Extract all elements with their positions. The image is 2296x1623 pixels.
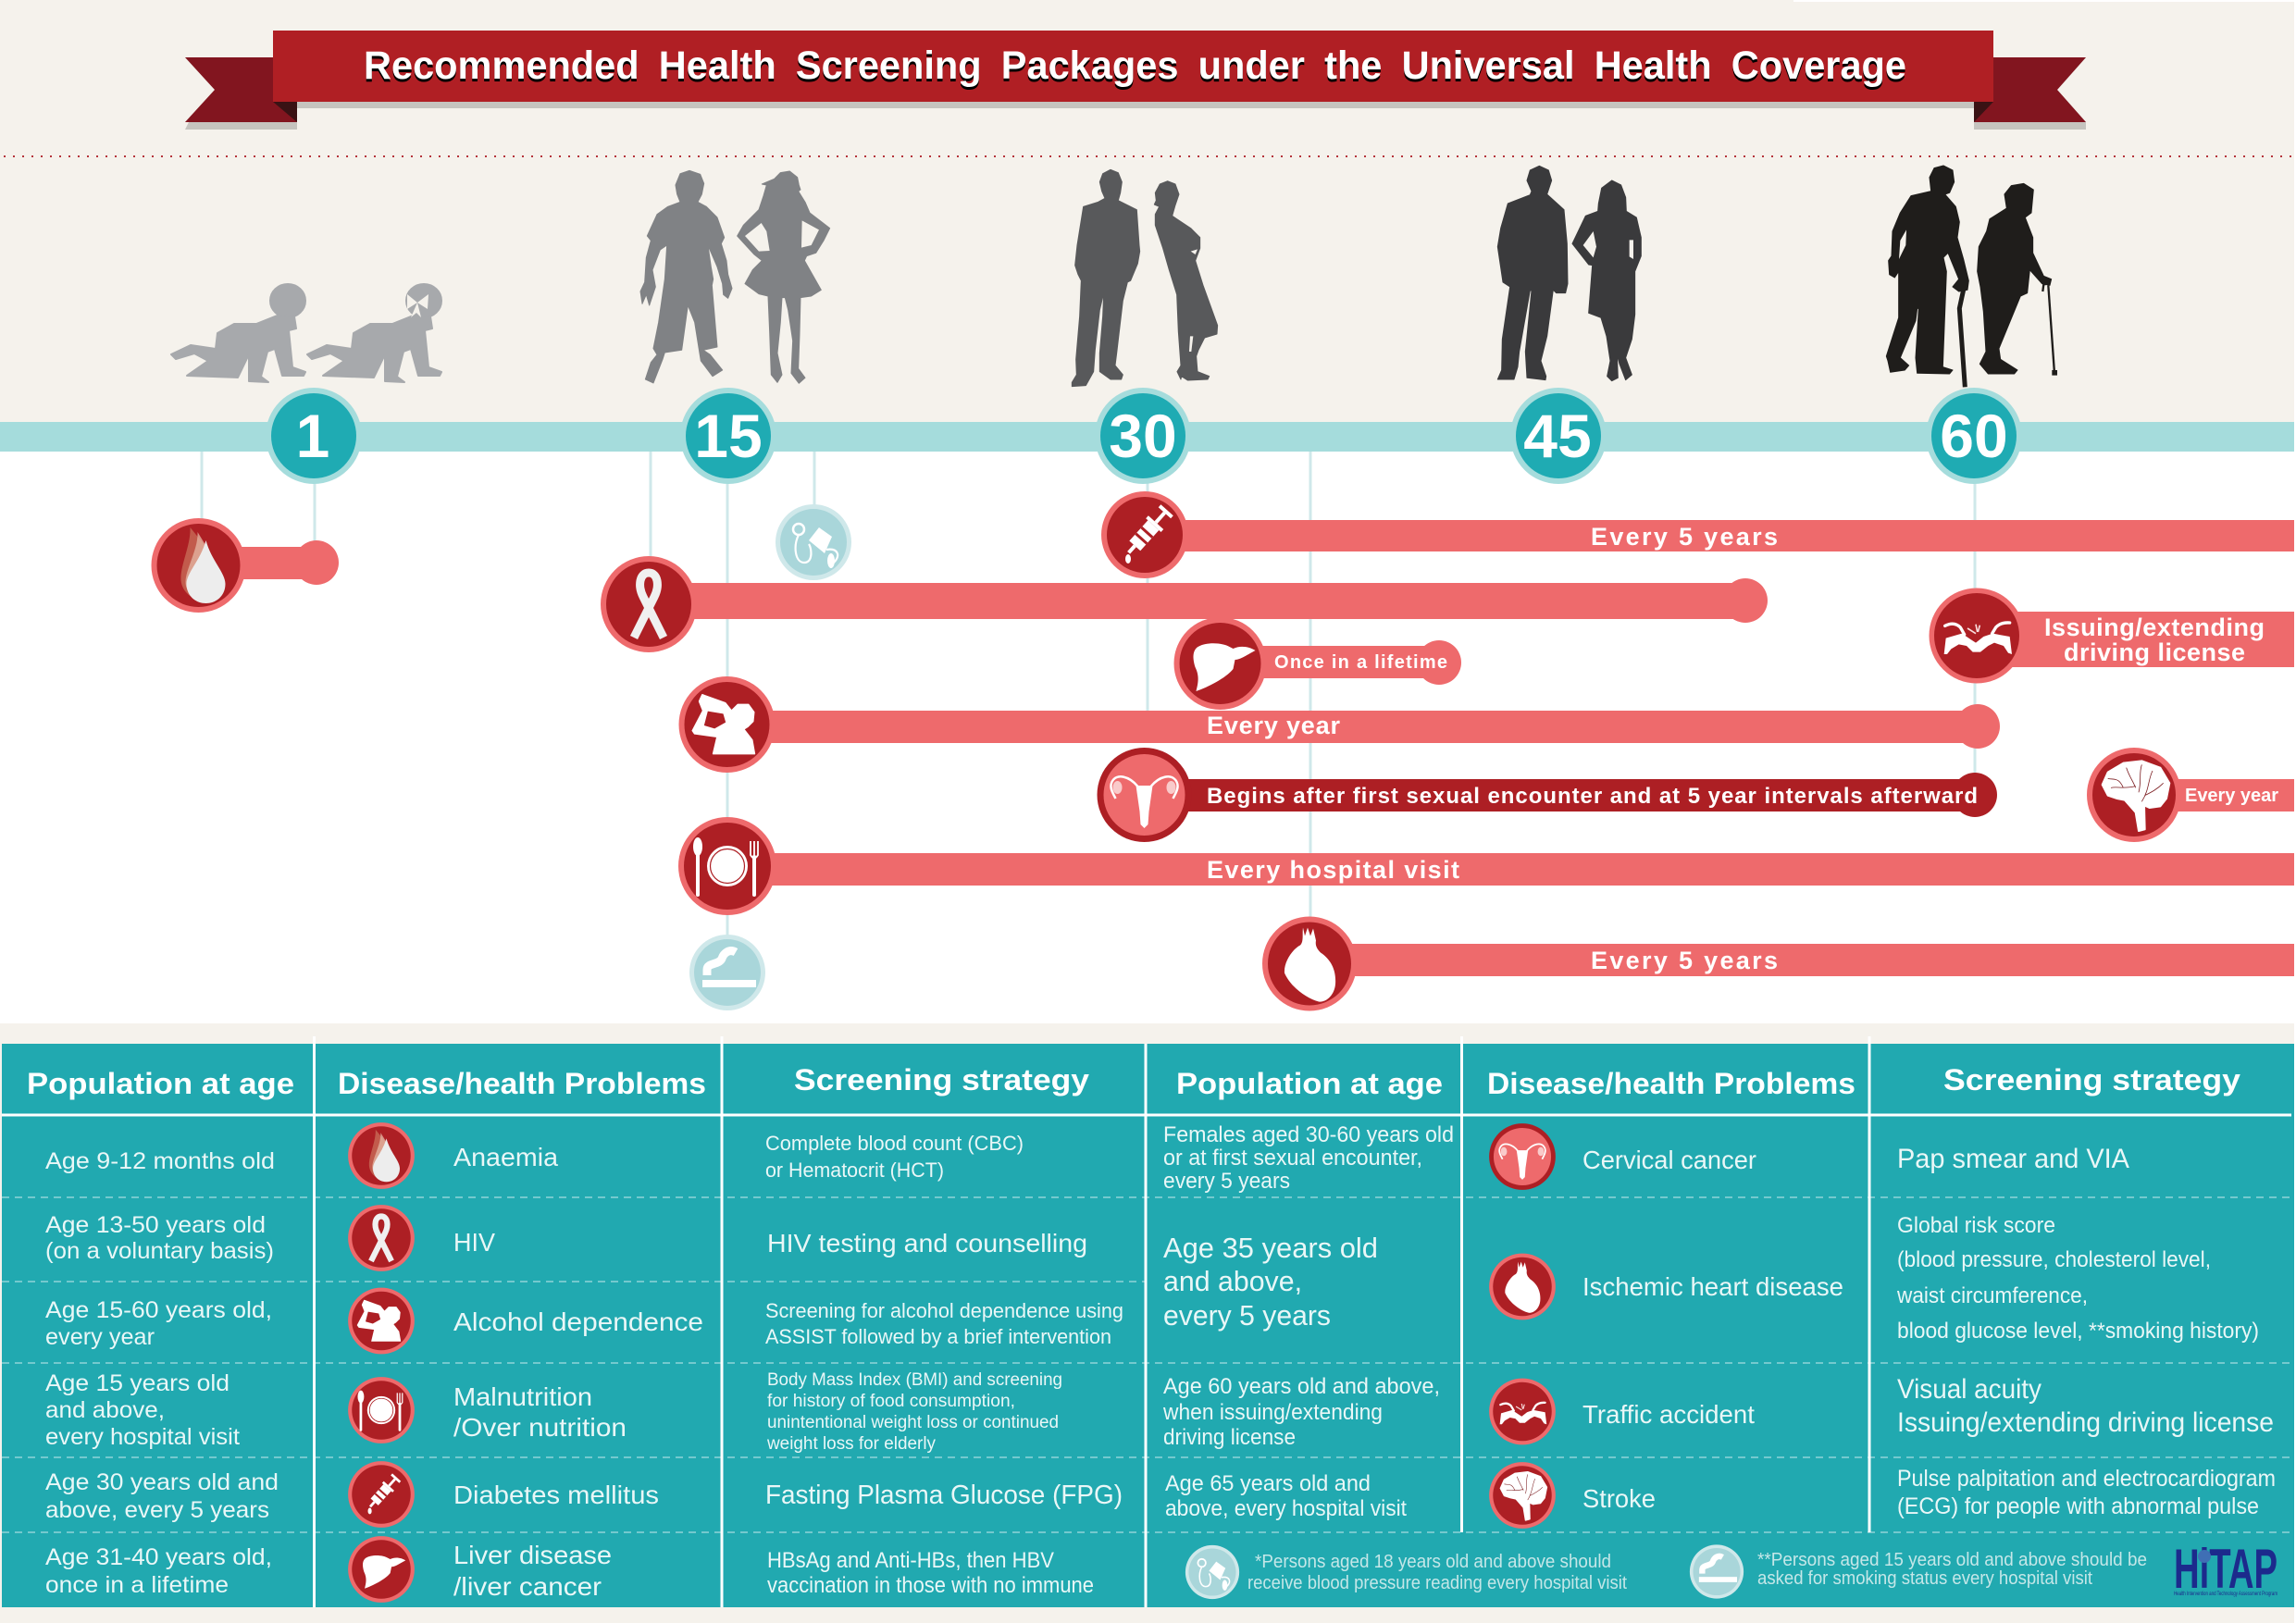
bar: stroke every year	[2134, 779, 2294, 812]
column: population right: driving license	[1163, 1425, 1296, 1450]
column: population right: Age 35 years old	[1163, 1232, 1378, 1264]
column: population right: Females aged 30-60 years old	[1163, 1122, 1454, 1147]
age marker 15	[680, 388, 776, 484]
silhouette: teenagers age 15	[640, 170, 830, 383]
bar: nutrition every hospital visit: Every hospital visit	[1207, 856, 1459, 884]
timeline connector lines	[202, 452, 1975, 944]
dotted separator	[4, 155, 2296, 157]
column: strategy right: Pulse palpitation and electrocardiogram	[1897, 1466, 2276, 1492]
bar: nutrition every hospital visit	[727, 853, 2294, 886]
column: strategy left: HBsAg and Anti-HBs, then HBV	[767, 1548, 1054, 1573]
column: population left: (on a voluntary basis)	[45, 1238, 274, 1264]
column: population left: Age 15-60 years old,	[45, 1297, 272, 1323]
footnote: blood pressure: receive blood pressure reading every hospital visit	[1247, 1573, 1627, 1593]
icon: liver	[1173, 617, 1266, 710]
column: strategy left: ASSIST followed by a brief intervention	[765, 1325, 1111, 1348]
column: disease names left: /liver cancer	[453, 1572, 602, 1601]
table headers	[27, 1063, 2240, 1100]
column: strategy left: Fasting Plasma Glucose (FPG)	[765, 1481, 1123, 1510]
icon: brain	[2087, 748, 2181, 842]
column: disease names left: HIV	[453, 1228, 495, 1257]
silhouette: babies age 1	[171, 284, 441, 382]
bar: alcohol every year: Every year	[1207, 712, 1340, 739]
column: population right: Age 60 years old and above,	[1163, 1374, 1440, 1399]
icon: plate and cutlery	[678, 817, 776, 915]
column: disease names left: Liver disease	[453, 1541, 612, 1569]
bar: cervical screening: Begins after first sexual encounter and at 5 year intervals afterward	[1207, 784, 1978, 809]
column: strategy right: blood glucose level, **smoking history)	[1897, 1319, 2259, 1344]
footnote: smoking: **Persons aged 15 years old and above should be	[1757, 1550, 2147, 1570]
column: population left: every year	[45, 1324, 155, 1350]
table headers: Disease/health Problems	[338, 1067, 706, 1100]
icon: anaemia drop	[152, 518, 246, 613]
bar: cervical screening	[1144, 773, 1997, 817]
column: population left: Age 30 years old and	[45, 1469, 279, 1495]
column: disease icons right	[1489, 1123, 1556, 1529]
column: strategy right: waist circumference,	[1896, 1283, 2088, 1308]
age marker 1	[266, 388, 362, 484]
column: population right: above, every hospital visit	[1165, 1496, 1407, 1521]
column: strategy left: unintentional weight loss or continued	[767, 1413, 1059, 1432]
silhouette: adults age 45	[1497, 166, 1641, 381]
column: population left: Age 9-12 months old	[45, 1148, 275, 1174]
table headers: Population at age	[1176, 1067, 1443, 1100]
title banner	[185, 31, 2086, 130]
column: strategy left: vaccination in those with no immune	[767, 1573, 1094, 1598]
column: population left: every hospital visit	[45, 1424, 240, 1450]
column: population right: Age 65 years old and	[1165, 1471, 1371, 1496]
column: population right: or at first sexual encounter,	[1163, 1146, 1422, 1171]
icon: car crash	[1929, 588, 2025, 683]
table headers: Screening strategy	[794, 1063, 1089, 1096]
column: strategy left: Screening for alcohol dependence using	[765, 1299, 1123, 1322]
table headers: Screening strategy	[1943, 1063, 2240, 1096]
column: population left: once in a lifetime	[45, 1572, 229, 1598]
bar: driving license	[1977, 612, 2294, 667]
table headers: Population at age	[27, 1067, 294, 1100]
age marker 45: 45	[1523, 402, 1592, 470]
column: strategy left: Body Mass Index (BMI) and screening	[767, 1370, 1062, 1390]
title text: Recommended Health Screening Packages under the Universal Health Coverage	[364, 43, 1906, 88]
footnote: smoking: asked for smoking status every hospital visit	[1757, 1568, 2092, 1589]
column: population right: and above,	[1163, 1265, 1302, 1297]
column: strategy left: HIV testing and counselling	[767, 1229, 1087, 1258]
column: disease names right	[1582, 1146, 1843, 1513]
column: strategy right: (blood pressure, cholesterol level,	[1897, 1247, 2211, 1272]
footnote: blood pressure	[1185, 1545, 1627, 1599]
column: population left: and above,	[45, 1397, 165, 1423]
icon: heart	[1262, 916, 1357, 1010]
table headers: Disease/health Problems	[1487, 1067, 1855, 1100]
bar: alcohol every year	[727, 704, 2000, 749]
column: disease names right: Cervical cancer	[1582, 1146, 1756, 1174]
screening table	[2, 1036, 2294, 1607]
column: population left	[45, 1148, 279, 1598]
age marker 15: 15	[694, 402, 763, 470]
column: strategy left: for history of food consumption,	[767, 1392, 1015, 1411]
bar: anaemia	[198, 540, 339, 585]
column: strategy right: Pap smear and VIA	[1897, 1144, 2129, 1174]
column: population right	[1162, 1122, 1454, 1521]
silhouette: seniors age 60	[1886, 166, 2057, 387]
age marker 30: 30	[1109, 402, 1177, 470]
age marker 45	[1510, 388, 1607, 484]
silhouette: adults age 30	[1072, 169, 1218, 387]
column: disease names left: Anaemia	[453, 1143, 558, 1171]
bar: heart disease every 5 years	[1309, 944, 2294, 976]
column: disease names right: Stroke	[1582, 1484, 1656, 1513]
column: strategy right: Issuing/extending driving license	[1897, 1407, 2274, 1438]
icon: HIV ribbon	[601, 556, 697, 652]
bar: stroke every year: Every year	[2185, 786, 2278, 806]
column: disease names left: Malnutrition	[453, 1382, 592, 1411]
column: population left: Age 13-50 years old	[45, 1212, 266, 1238]
column: strategy left: weight loss for elderly	[766, 1434, 936, 1454]
column: disease names left: Alcohol dependence	[453, 1307, 703, 1336]
footnote: blood pressure: *Persons aged 18 years old and above should	[1255, 1552, 1611, 1572]
icon: uterus	[1098, 748, 1192, 842]
column: disease names right: Ischemic heart disease	[1582, 1272, 1843, 1301]
column: disease names left	[453, 1143, 703, 1601]
column: disease names left: /Over nutrition	[453, 1413, 627, 1442]
column: population right: every 5 years	[1163, 1169, 1290, 1194]
column: population right: every 5 years	[1163, 1299, 1331, 1332]
column: disease names left: Diabetes mellitus	[453, 1481, 659, 1509]
column: strategy left	[765, 1132, 1123, 1598]
age marker 60: 60	[1940, 402, 2008, 470]
age marker 30	[1095, 388, 1191, 484]
column: strategy left: or Hematocrit (HCT)	[765, 1158, 944, 1182]
column: strategy right	[1896, 1144, 2276, 1519]
icon: blood pressure cuff	[776, 504, 851, 580]
bar: diabetes every 5 years: Every 5 years	[1591, 523, 1778, 551]
silhouettes by age	[171, 166, 2057, 387]
column: strategy left: Complete blood count (CBC)	[765, 1132, 1024, 1155]
bar: HIV	[649, 578, 1768, 623]
age marker 1: 1	[296, 402, 329, 470]
column: disease icons left	[348, 1122, 415, 1603]
column: disease names right: Traffic accident	[1582, 1400, 1755, 1429]
column: strategy right: Global risk score	[1897, 1213, 2055, 1238]
column: population left: Age 15 years old	[45, 1370, 230, 1396]
bar: liver once in a lifetime: Once in a lifetime	[1274, 652, 1447, 673]
footnote: smoking	[1690, 1544, 2147, 1599]
age marker 60	[1926, 388, 2022, 484]
column: strategy right: Visual acuity	[1897, 1374, 2042, 1405]
column: population left: above, every 5 years	[45, 1497, 269, 1523]
bar: diabetes every 5 years	[1144, 520, 2294, 551]
bar: heart disease every 5 years: Every 5 years	[1591, 947, 1778, 974]
bar: driving license: driving license	[2064, 638, 2245, 666]
column: strategy right: (ECG) for people with abnormal pulse	[1897, 1493, 2259, 1519]
icon: syringe	[1101, 491, 1188, 578]
column: population right: when issuing/extending	[1162, 1400, 1383, 1425]
bar: driving license: Issuing/extending	[2044, 613, 2265, 641]
icon: alcohol drinker	[679, 676, 776, 773]
age timeline band	[0, 422, 2294, 452]
column: population left: Age 31-40 years old,	[45, 1544, 272, 1570]
icon: cigarette	[689, 935, 765, 1010]
bar: liver once in a lifetime	[1220, 640, 1461, 685]
